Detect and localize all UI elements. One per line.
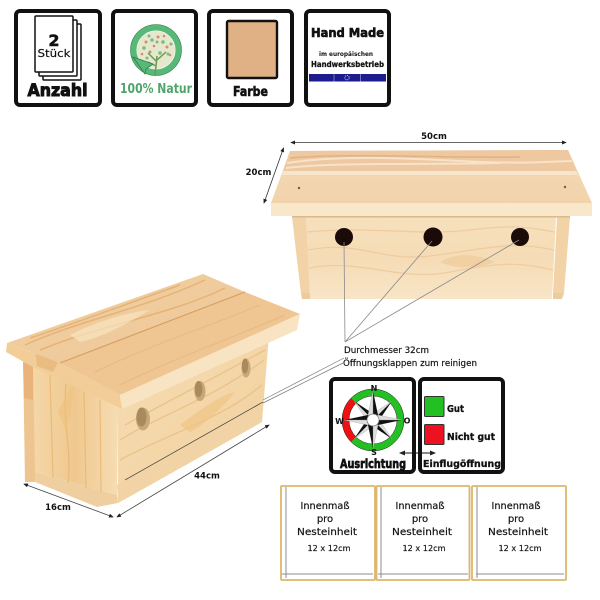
dimension: 20cm: 20cm	[246, 168, 272, 178]
entrance holes	[335, 228, 353, 246]
panel: Einflugöffnung legend: Gut	[447, 404, 464, 415]
panel: Einflugöffnung legend: Nicht gut	[447, 432, 495, 443]
long front panel	[117, 335, 269, 503]
panel: Ausrichtung compass: O	[404, 416, 411, 426]
panel: Ausrichtung compass: N	[371, 384, 377, 393]
icon card: Hand Made: Handwerksbetrieb	[311, 60, 384, 69]
back post	[23, 355, 36, 482]
roof front edge	[271, 203, 592, 216]
callout text: Durchmesser: Durchmesser 32cm	[344, 346, 429, 356]
panel: inner dimension unit 3: Innenmaß	[492, 501, 540, 512]
icon card: Anzahl: Anzahl	[28, 81, 88, 101]
foot board	[35, 472, 118, 507]
panel: Ausrichtung compass: S	[371, 448, 377, 457]
right side post	[553, 217, 570, 294]
panel: inner dimension unit 2: Nesteinheit	[392, 527, 452, 538]
end panel	[33, 362, 117, 495]
callout text: Öffnungsklappen: Öffnungsklappen zum reinigen	[343, 358, 477, 369]
colour swatch	[227, 21, 277, 78]
dimension: 16cm: 16cm	[45, 503, 71, 513]
panel: inner dimension unit 3: 12 x 12cm	[498, 544, 542, 553]
panel: Ausrichtung compass: W	[335, 417, 344, 426]
panel: inner dimension unit 3	[472, 486, 566, 580]
front panel	[306, 217, 556, 299]
panel: Einflugöffnung legend: Einflugöffnung	[423, 459, 501, 470]
right roof plank	[60, 292, 300, 395]
left roof plank	[7, 274, 245, 363]
side holes	[136, 408, 150, 430]
dimension: 44cm	[117, 425, 269, 517]
panel: inner dimension unit 1: 12 x 12cm	[308, 544, 351, 553]
callout lines to holes and flap	[125, 240, 519, 480]
icon card: Hand Made: Hand Made	[311, 26, 384, 40]
product photo: top nest box front view	[271, 150, 592, 299]
panel: Einflugöffnung legend	[420, 379, 503, 472]
panel: inner dimension unit 1: pro	[317, 514, 333, 525]
icon card: 100% Natur: 100% Natur	[120, 82, 192, 97]
icon card: Anzahl	[16, 11, 100, 105]
panel: Ausrichtung compass: Ausrichtung	[340, 457, 406, 471]
icon card: Farbe	[209, 11, 292, 105]
dimension: 50cm: 50cm	[421, 132, 447, 142]
panel: inner dimension unit 2: pro	[412, 514, 428, 525]
panel: inner dimension unit 3: Nesteinheit	[488, 527, 548, 538]
panel: inner dimension unit 1: Innenmaß	[300, 501, 350, 512]
roof front edge	[120, 314, 300, 409]
product photo: bottom nest box angled view	[6, 274, 300, 507]
panel: inner dimension unit 1	[281, 486, 375, 580]
icon card: Hand Made	[306, 11, 389, 105]
dimension: 16cm	[24, 484, 113, 517]
panel: Ausrichtung compass	[331, 379, 414, 472]
compass rose	[344, 391, 402, 449]
panel: inner dimension unit 2: 12 x 12cm	[402, 544, 446, 553]
roof end edge	[6, 343, 122, 409]
icon card: Farbe: Farbe	[233, 85, 268, 100]
dimension: 44cm: 44cm	[194, 472, 220, 482]
icon card: Anzahl: Stück	[38, 47, 71, 60]
left side post	[292, 217, 310, 294]
panel: inner dimension unit 1: Nesteinheit	[297, 527, 357, 538]
icon card: 100% Natur	[113, 11, 196, 105]
arrow between panels	[400, 452, 435, 454]
icon card: Hand Made: im europäischen	[319, 51, 373, 58]
panel: inner dimension unit 3: pro	[508, 514, 524, 525]
panel: inner dimension unit 2	[376, 486, 470, 580]
panel: inner dimension unit 2: Innenmaß	[396, 501, 444, 512]
roof top	[271, 150, 592, 203]
icon card: Anzahl: 2	[48, 31, 60, 50]
dimension: 20cm	[246, 148, 284, 203]
